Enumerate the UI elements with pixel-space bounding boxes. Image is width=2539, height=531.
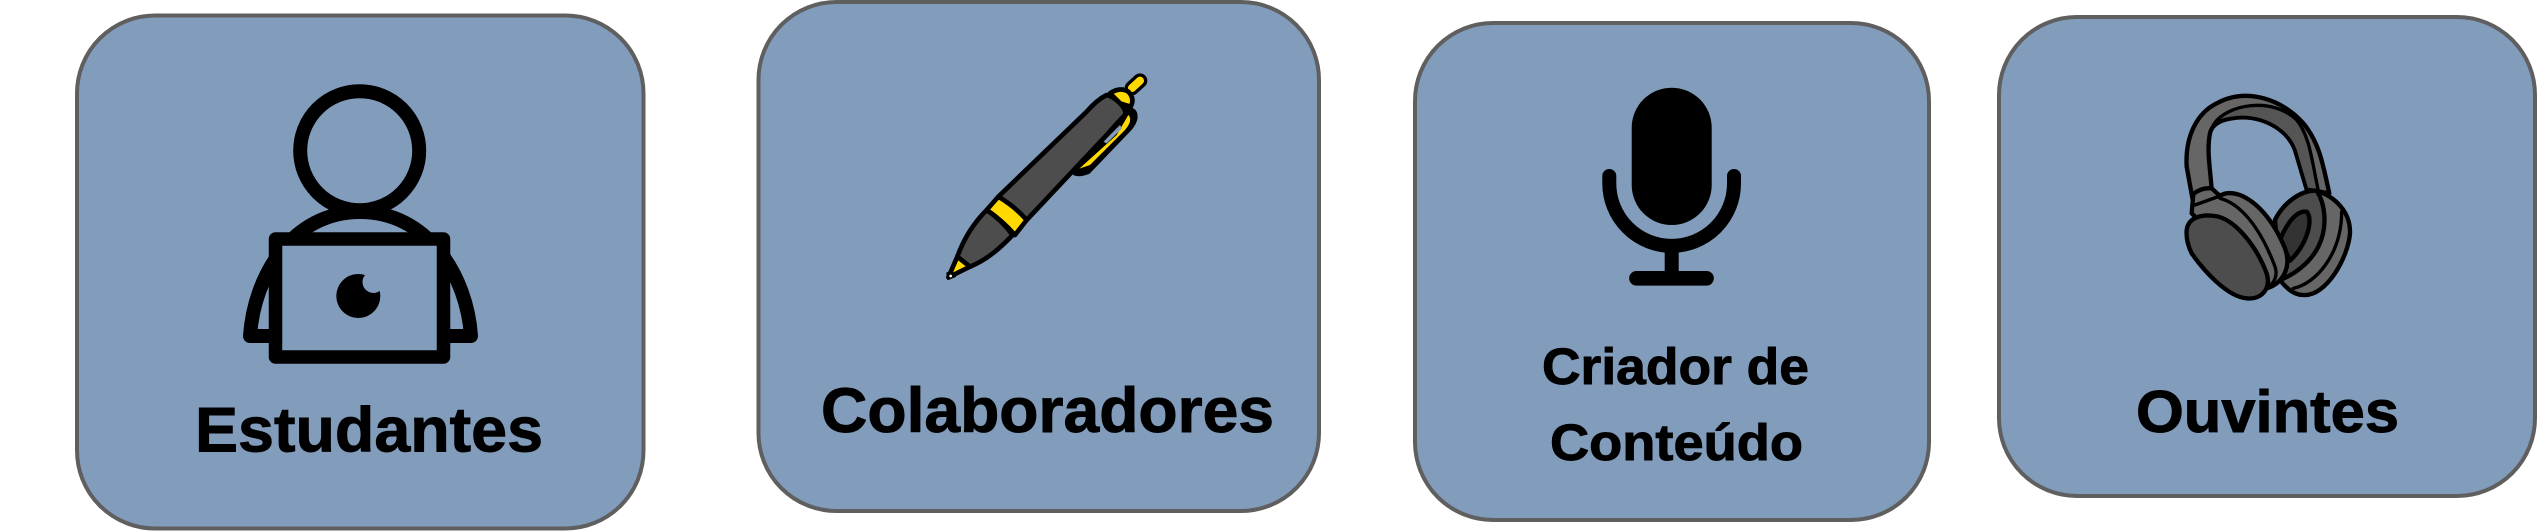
panel background: Criador de Conteúdo <box>1415 23 1929 520</box>
panel background: Estudantes <box>77 16 644 528</box>
panel: Colaboradores <box>758 2 1319 511</box>
panel: Estudantes <box>77 16 644 528</box>
icon: pen <box>948 81 1140 279</box>
heading: Estudantes: Estudantes <box>195 396 543 466</box>
heading: Criador de Conteúdo <box>1542 338 1809 471</box>
panel: Ouvintes <box>1999 17 2535 496</box>
heading: Ouvintes: Ouvintes <box>2136 379 2399 445</box>
heading: Criador de Conteúdo: Conteúdo <box>1550 414 1803 471</box>
icon: headphones <box>2187 96 2350 299</box>
icon: student with laptop <box>250 91 471 357</box>
panel background: Ouvintes <box>1999 17 2535 496</box>
heading: Colaboradores: Colaboradores <box>821 376 1274 446</box>
panel: Criador de Conteúdo <box>1415 23 1929 520</box>
panel background: Colaboradores <box>758 2 1319 511</box>
icon: microphone <box>1609 88 1734 278</box>
heading: Criador de Conteúdo: Criador de <box>1542 338 1809 395</box>
